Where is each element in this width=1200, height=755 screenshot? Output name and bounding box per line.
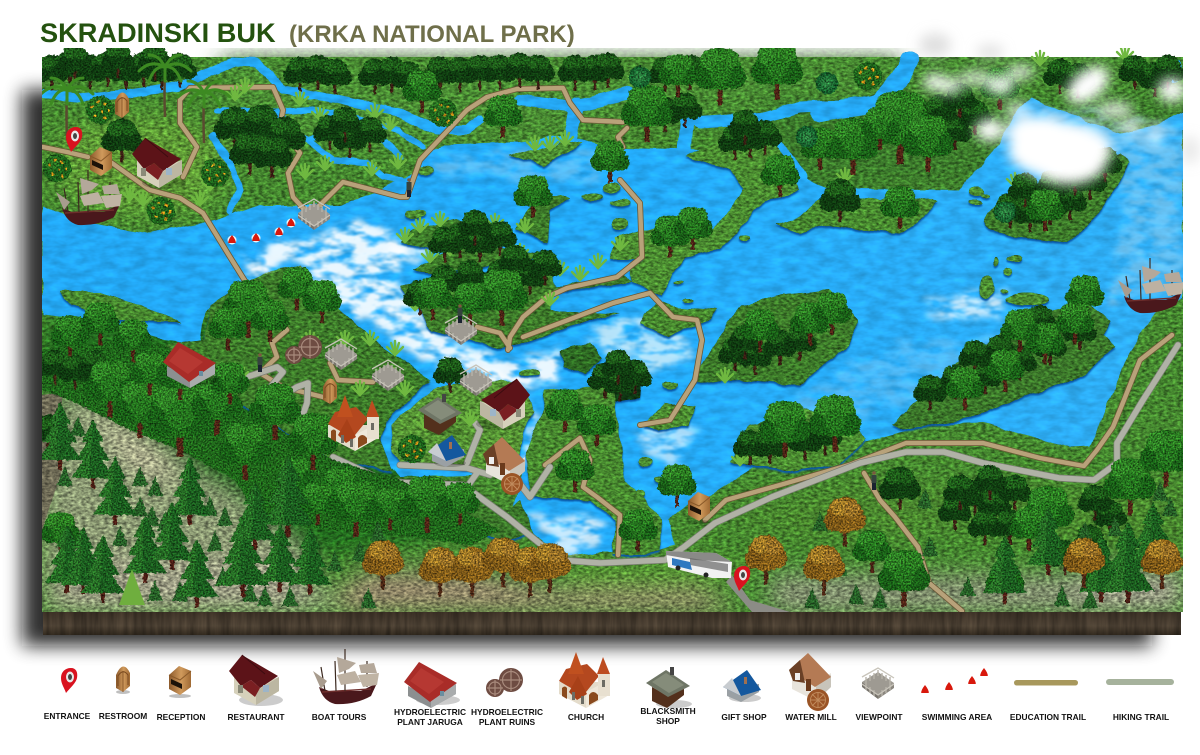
icon: restroom south	[323, 378, 337, 406]
legend: water mill	[785, 653, 837, 722]
title: (KRKA NATIONAL PARK)	[289, 21, 575, 48]
legend: hydroelectric plant Jaruga	[394, 662, 466, 727]
legend: hydroelectric plant ruins	[471, 668, 543, 727]
legend: swimming area: SWIMMING AREA	[922, 712, 992, 722]
palm trees	[41, 55, 230, 143]
icon: restroom north	[115, 92, 129, 120]
legend: hydroelectric plant Jaruga: HYDROELECTRIC	[394, 707, 466, 717]
legend: hiking trail	[1106, 679, 1174, 722]
education trail (brown)	[43, 87, 1172, 611]
icon: water mill	[483, 437, 525, 495]
legend: gift shop: GIFT SHOP	[721, 712, 767, 722]
legend: blacksmith shop: BLACKSMITH	[640, 706, 696, 716]
icon: visitors	[258, 178, 876, 490]
legend	[44, 649, 1174, 727]
legend: church: CHURCH	[568, 712, 604, 722]
legend: hydroelectric plant ruins: PLANT RUINS	[479, 717, 536, 727]
ferns	[122, 46, 1133, 465]
hiking trail (grey)	[217, 345, 1178, 563]
land areas and islands	[60, 127, 1130, 555]
forest: pines	[38, 402, 1178, 612]
icon: restaurant	[132, 138, 186, 189]
legend: restaurant	[227, 655, 285, 722]
orange bushes	[43, 62, 882, 463]
clouds	[919, 33, 1200, 184]
icons: map buildings	[56, 92, 1184, 591]
icon: entrance pin south	[734, 566, 750, 591]
icon: entrance pin north	[66, 127, 82, 152]
icon: viewpoint 1	[298, 199, 330, 230]
legend: hydroelectric plant ruins: HYDROELECTRIC	[471, 707, 543, 717]
legend: viewpoint: VIEWPOINT	[856, 712, 903, 722]
legend: entrance: ENTRANCE	[44, 711, 91, 721]
legend: education trail	[1010, 680, 1086, 722]
legend: hydroelectric plant Jaruga: PLANT JARUGA	[397, 717, 463, 727]
icon: church	[328, 395, 379, 451]
forest: green trees	[31, 43, 1192, 607]
icon: reception north	[90, 147, 112, 179]
legend: church	[559, 652, 610, 722]
legend: boat tours: BOAT TOURS	[312, 712, 367, 722]
icon: blacksmith shop	[418, 394, 464, 435]
legend: blacksmith shop	[640, 667, 696, 726]
legend: reception	[157, 666, 205, 722]
icon: reception south	[688, 492, 710, 524]
legend: gift shop	[721, 670, 767, 722]
autumn trees	[362, 497, 1183, 597]
river and lakes	[42, 60, 1183, 557]
round shrubs	[629, 66, 1016, 223]
soil strip	[43, 612, 1181, 635]
waterfalls and foam	[235, 105, 1180, 552]
legend: restaurant: RESTAURANT	[227, 712, 285, 722]
legend: education trail: EDUCATION TRAIL	[1010, 712, 1086, 722]
title	[40, 17, 575, 48]
icon: swimming buoys	[228, 218, 296, 244]
forest: dark trees	[35, 43, 1185, 575]
icon: hydroelectric plant Jaruga	[163, 342, 219, 388]
legend: reception: RECEPTION	[157, 712, 205, 722]
legend: viewpoint	[856, 668, 903, 722]
icon: viewpoint 3	[325, 339, 357, 370]
icon: viewpoint 5	[460, 365, 492, 396]
icon: striped fir	[119, 569, 145, 605]
legend: hiking trail: HIKING TRAIL	[1113, 712, 1169, 722]
legend: swimming area	[920, 668, 992, 722]
icon: viewpoint 2	[445, 314, 477, 345]
icon: boat west	[56, 170, 122, 225]
legend: entrance	[44, 668, 91, 721]
icon: tour bus	[666, 551, 732, 578]
map board	[31, 43, 1192, 612]
icon: viewpoint 4	[372, 360, 404, 391]
legend: blacksmith shop: SHOP	[656, 716, 680, 726]
title: SKRADINSKI BUK	[40, 17, 276, 48]
legend: boat tours	[312, 649, 379, 722]
icon: restaurant village	[476, 379, 530, 430]
icon: boat east	[1118, 258, 1184, 313]
icon: gift shop	[428, 435, 466, 467]
legend: restroom	[99, 666, 147, 721]
legend: restroom: RESTROOM	[99, 711, 147, 721]
icon: hydroelectric ruins	[285, 335, 322, 364]
legend: water mill: WATER MILL	[785, 712, 837, 722]
land base	[42, 57, 1183, 612]
board shadow	[22, 90, 1152, 646]
dirt path to entrance	[726, 575, 790, 612]
